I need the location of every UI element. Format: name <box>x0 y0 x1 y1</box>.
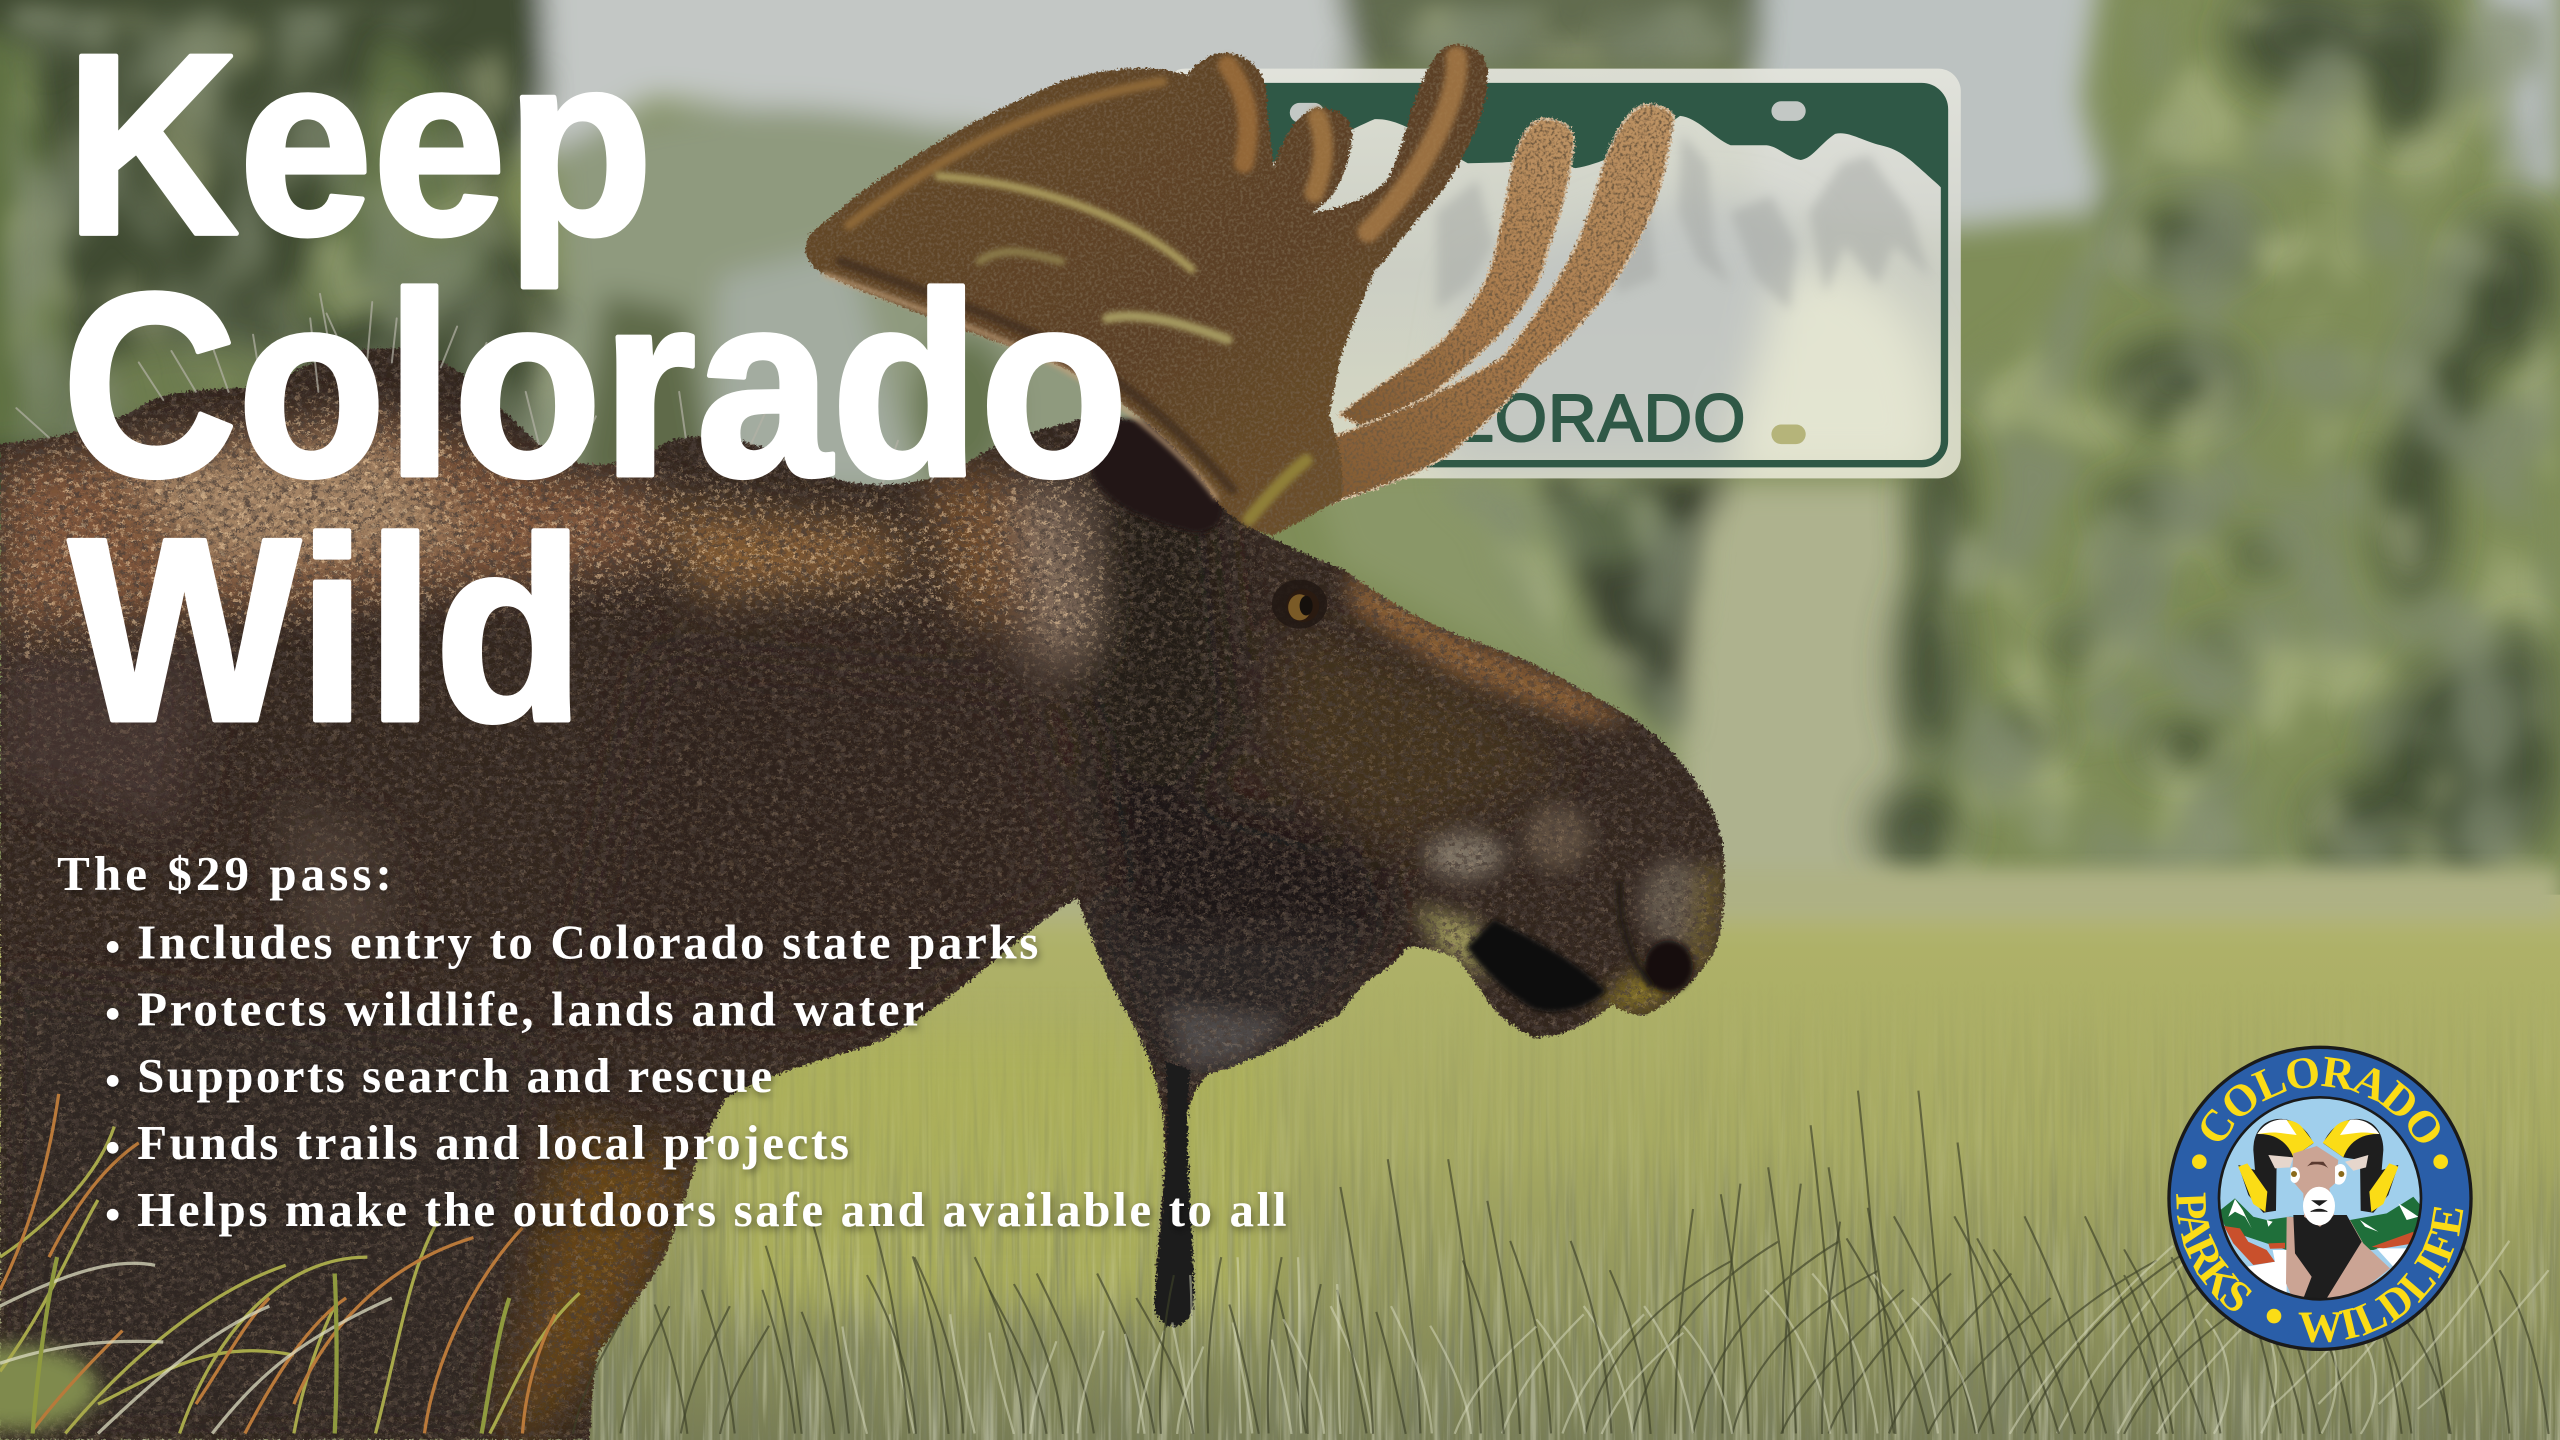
plate sky band and mountains <box>1179 87 1946 193</box>
center tree top <box>1322 0 1771 73</box>
title: Colorado <box>62 240 1128 531</box>
list items: Includes entry to Colorado state parks <box>137 914 1038 969</box>
meadow <box>0 869 2560 1440</box>
list items: Supports search and rescue <box>137 1048 772 1103</box>
plate haze <box>1437 199 1935 473</box>
title <box>62 0 1128 776</box>
logo dots <box>2192 1154 2448 1323</box>
plate mountain shading <box>1437 134 1930 310</box>
plate word: COLORADO <box>1353 381 1745 456</box>
distant haze <box>490 107 1192 555</box>
center trees <box>1306 465 1731 767</box>
logo ram emblem <box>2218 1097 2422 1300</box>
moose nostril and mouth <box>1466 882 1693 1012</box>
pass benefits list <box>57 846 1287 1237</box>
meadow grass blades <box>573 1091 2549 1434</box>
logo lettering: PARKS <box>2176 1192 2252 1311</box>
list heading: The $29 pass: <box>57 846 392 901</box>
logo lettering: COLORADO <box>2201 1056 2440 1143</box>
foreground grass left <box>0 1094 580 1433</box>
license plate <box>1162 69 1961 478</box>
moose eye <box>1272 580 1327 629</box>
list items: Helps make the outdoors safe and available to all <box>137 1182 1287 1237</box>
moose ear <box>1091 419 1222 533</box>
left tree line <box>0 0 563 539</box>
right horn <box>2323 1119 2398 1213</box>
pale column <box>1665 482 1910 914</box>
moose hump hair <box>16 294 963 487</box>
Colorado Parks and Wildlife logo <box>2167 1046 2473 1351</box>
title: Keep <box>65 0 653 290</box>
plate bolt holes <box>1290 101 1806 444</box>
antler long tines <box>1306 104 1674 514</box>
blurred forest background <box>0 0 2560 914</box>
ram face <box>2292 1146 2338 1227</box>
moose <box>0 293 1727 1440</box>
logo lettering: WILDLIFE <box>2298 1206 2464 1342</box>
antler <box>806 44 1674 536</box>
list items <box>107 914 1287 1237</box>
plate green panel <box>1180 87 1944 464</box>
right forest dark clumps <box>1873 0 2558 880</box>
forest mottling <box>0 0 2560 914</box>
ram ears <box>2268 1155 2368 1171</box>
antler highlights <box>824 57 1457 519</box>
antler palm <box>806 44 1488 536</box>
sky <box>522 0 1355 212</box>
logo lettering <box>2176 1056 2464 1342</box>
left horn <box>2238 1119 2314 1213</box>
moose body <box>0 346 1727 1440</box>
right forest silhouette <box>1894 0 2560 914</box>
list items: Protects wildlife, lands and water <box>137 981 924 1036</box>
title: Wild <box>69 485 584 776</box>
moose bell strand <box>1154 1061 1194 1327</box>
list items: Funds trails and local projects <box>137 1115 849 1170</box>
